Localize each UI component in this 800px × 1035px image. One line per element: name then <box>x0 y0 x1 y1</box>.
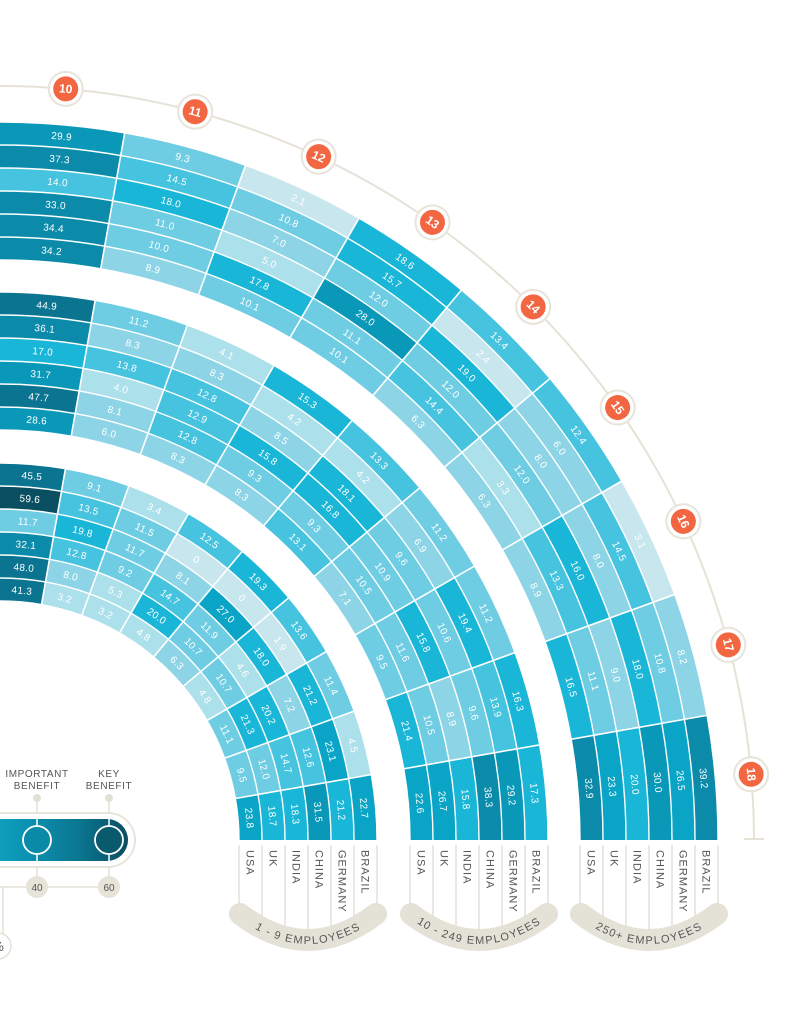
band 1-9 seg 14: 11.9 <box>198 620 220 642</box>
band 250+ seg 10: 34.2 <box>41 245 62 258</box>
band 10-249 seg 12: 4.1 <box>217 347 235 363</box>
band 250+ seg 12: 10.8 <box>277 212 300 231</box>
band 250+ seg 18: 23.3 <box>605 776 618 797</box>
band 1-9 seg 10: 59.6 <box>19 493 41 506</box>
band 1-9 seg 14: 19.3 <box>247 571 269 594</box>
marker 10 <box>47 70 84 107</box>
band 1-9 seg 12: 11.5 <box>133 521 156 540</box>
axis labels: 1 - 9 employees: INDIA <box>290 850 302 884</box>
band 10-249 seg 17: 9.6 <box>466 705 480 722</box>
band 10-249 seg 10: 36.1 <box>34 323 56 336</box>
band 10-249 seg 10: 31.7 <box>30 369 52 382</box>
band 10-249 seg 16: 19.4 <box>455 612 474 635</box>
band 250+ seg 17: 11.1 <box>585 670 601 692</box>
band 10-249 seg 16: 11.6 <box>393 641 411 664</box>
band 250+ seg 16: 8.9 <box>527 581 543 600</box>
legend labels: KEY <box>98 769 120 780</box>
band 1-9 seg 16: 21.3 <box>238 713 256 737</box>
band 250+ seg 10: 34.4 <box>43 222 64 235</box>
band 10-249 seg 11: 13.8 <box>115 359 138 375</box>
band 1-9 seg 11: 3.2 <box>56 592 73 606</box>
band 10-249 seg 10 <box>0 210 630 1035</box>
band 1-9 seg 10: 48.0 <box>13 562 35 575</box>
band 1-9 seg 15: 10.7 <box>213 672 234 695</box>
legend: colour scale <box>0 769 135 959</box>
band 1-9 seg 16: 11.4 <box>321 675 340 697</box>
marker 14: 14 <box>523 297 543 317</box>
axis labels: 250+ employees: GERMANY <box>676 850 688 913</box>
band 10-249 seg 10: 47.7 <box>28 392 50 405</box>
band 250+ seg 16: 16.0 <box>568 559 586 583</box>
legend labels: BENEFIT <box>14 781 60 792</box>
band 1-9 seg 12: 9.2 <box>116 564 134 580</box>
band 1-9 seg 16: 11.1 <box>217 723 235 746</box>
marker 13 <box>409 199 456 246</box>
band 1-9 seg 10: 45.5 <box>21 471 43 483</box>
band 1-9 seg 13: 8.1 <box>173 570 192 588</box>
band 10-249 seg 11: 11.2 <box>128 315 150 331</box>
band 1-9 seg 13: 14.7 <box>158 588 181 608</box>
band 10-249 seg 18: 22.6 <box>413 793 425 814</box>
band 250+ seg 10: 29.9 <box>51 131 72 144</box>
band 10-249 seg 16: 15.8 <box>413 631 432 655</box>
axis labels: 10 - 249 employees: USA <box>414 850 426 876</box>
band 1-9 seg 12 <box>0 314 526 1035</box>
band 10-249 seg 13: 15.3 <box>296 391 319 412</box>
band 1-9 seg 17 <box>0 355 485 1035</box>
band 1-9 seg 16: 21.2 <box>300 684 319 707</box>
marker 13: 13 <box>423 213 442 232</box>
band 10-249 seg 15: 7.1 <box>336 590 353 608</box>
band 1-9 seg 18: 21.2 <box>334 799 347 821</box>
band 10-249 seg 14: 16.8 <box>319 499 341 521</box>
percent marker <box>0 933 11 959</box>
band 1-9 seg 11: 12.8 <box>65 547 88 563</box>
band 250+ seg 13: 18.6 <box>393 252 416 273</box>
band 1-9 seg 13: 12.5 <box>197 531 221 552</box>
band 10-249 seg 16: 11.2 <box>476 602 495 625</box>
axis labels: 1 - 9 employees: BRAZIL <box>358 850 370 895</box>
axis labels: 250+ employees: CHINA <box>654 850 666 889</box>
scale value 60: 60 <box>103 883 115 894</box>
axis labels: 250+ employees: INDIA <box>630 850 642 884</box>
legend labels <box>5 769 132 792</box>
band 1-9 seg 15: 18.0 <box>250 646 271 669</box>
band 1-9 seg 15: 13.6 <box>288 619 309 643</box>
band 10-249 seg 11: 8.1 <box>106 404 123 419</box>
band 1-9 seg 17: 9.5 <box>234 767 248 784</box>
axis labels: 10 - 249 employees: UK <box>438 850 450 867</box>
band 10-249 seg 14: 9.3 <box>304 517 323 536</box>
band 250+ seg 17: 10.8 <box>651 652 667 675</box>
band 10-249 seg 10: 17.0 <box>32 346 54 359</box>
band 1-9 seg 16 <box>0 314 526 1035</box>
band 250+ seg 15: 12.0 <box>511 463 532 487</box>
axis labels: 10 - 249 employees: 10 - 249 EMPLOYEES <box>417 918 540 944</box>
band 10-249 seg 13: 8.3 <box>232 487 251 504</box>
band 10-249 seg 13: 4.2 <box>285 411 303 429</box>
band 10-249 seg 12: 12.8 <box>195 387 219 406</box>
band 250+ seg 18: 39.2 <box>696 768 709 789</box>
band 10-249 seg 14: 13.3 <box>367 450 390 473</box>
band 250+ seg 13: 11.1 <box>341 327 363 348</box>
axis labels: 10 - 249 employees <box>400 845 558 951</box>
band 250+ seg 17: 18.0 <box>629 658 645 681</box>
band 1-9 seg 11: 19.8 <box>71 524 94 540</box>
band 10-249 seg 18: 26.7 <box>435 791 448 812</box>
band 10-249 seg 10: 28.6 <box>26 415 48 427</box>
band 1-9 seg 18 <box>0 411 429 1035</box>
marker 16 <box>661 499 706 544</box>
marker 18 <box>733 756 770 793</box>
axis labels: 1 - 9 employees: USA <box>244 850 256 876</box>
band 10-249 seg 13: 9.3 <box>245 468 264 486</box>
band 250+ seg 11: 11.0 <box>154 217 176 233</box>
band 1-9 seg 11: 9.1 <box>86 481 103 495</box>
band 10-249 seg 15: 10.5 <box>353 574 374 597</box>
band 250+ seg 18: 26.5 <box>674 770 686 791</box>
band 10-249 seg 13: 15.8 <box>256 447 279 468</box>
band 250+ seg 11: 14.5 <box>165 173 188 189</box>
axis labels: 250+ employees: UK <box>608 850 620 867</box>
band 1-9 seg 12: 3.2 <box>96 606 115 622</box>
band 250+ seg 18: 32.9 <box>582 778 595 799</box>
axis labels: 1 - 9 employees: CHINA <box>312 850 324 889</box>
band 1-9 seg 14: 6.3 <box>167 654 186 673</box>
marker 15 <box>594 384 641 431</box>
band 10-249 seg 12: 8.3 <box>208 367 226 384</box>
band 250+ seg 12: 5.0 <box>260 255 278 271</box>
band 10-249 seg 10: 44.9 <box>36 300 58 313</box>
marker 17: 17 <box>720 637 737 653</box>
band 1-9 seg 15 <box>0 289 551 1035</box>
band 1-9 seg 10 <box>0 411 429 1035</box>
axis labels: 1 - 9 employees: 1 - 9 EMPLOYEES <box>256 924 359 944</box>
axis labels: 10 - 249 employees: GERMANY <box>506 850 518 913</box>
marker 14 <box>509 283 557 331</box>
gradient pill <box>0 813 135 867</box>
band 1-9 seg 12: 5.3 <box>106 585 124 601</box>
band 250+ seg 14: 13.4 <box>488 330 510 352</box>
band 10-249 seg 18: 38.3 <box>481 787 494 808</box>
band 10-249 seg 12: 12.8 <box>176 429 199 447</box>
band 10-249 seg 12: 12.9 <box>185 408 209 427</box>
band 1-9 seg 17: 23.1 <box>322 740 338 763</box>
band 250+ seg 13: 15.7 <box>380 270 403 291</box>
band 10-249 seg 14: 13.1 <box>286 531 309 554</box>
band 250+ seg 14: 6.3 <box>408 413 427 432</box>
band 250+ seg 12: 17.8 <box>248 275 271 293</box>
band 250+ seg 10: 33.0 <box>45 200 66 212</box>
marker 16: 16 <box>674 512 693 531</box>
marker 11 <box>174 91 216 133</box>
band 250+ seg 13: 28.0 <box>353 308 377 329</box>
band 1-9 seg 12: 11.7 <box>123 542 146 561</box>
segment markers <box>47 70 770 793</box>
band 1-9 seg 14 <box>0 280 560 1035</box>
band 250+ seg 14: 12.0 <box>439 379 461 401</box>
band 1-9 seg 13 <box>0 289 551 1035</box>
band 250+ seg 16: 13.3 <box>547 569 565 593</box>
axis labels: 250+ employees: 250+ EMPLOYEES <box>596 922 701 944</box>
band 10-249 seg 11: 4.0 <box>112 382 129 397</box>
band 250+ seg 11: 8.9 <box>144 262 162 277</box>
band 1-9 seg 18: 18.3 <box>288 803 301 825</box>
band 250+ seg 11: 10.0 <box>147 239 170 255</box>
band 250+ seg 18: 30.0 <box>651 772 663 793</box>
axis labels: 1 - 9 employees: UK <box>266 850 278 867</box>
band 1-9 seg 10: 11.7 <box>17 516 38 529</box>
band 250+ seg 12: 2.1 <box>289 192 307 209</box>
band 250+ seg 12: 10.1 <box>238 295 261 314</box>
band 10-249 seg 12: 8.3 <box>169 451 187 467</box>
band 10-249 seg 18: 17.3 <box>527 783 540 804</box>
band 1-9 seg 17: 4.5 <box>345 737 359 754</box>
band 1-9 seg 17: 12.6 <box>300 746 316 769</box>
band 250+ seg 17: 8.2 <box>674 649 689 666</box>
axis labels: 10 - 249 employees: INDIA <box>460 850 472 884</box>
band 10-249 seg 15: 6.9 <box>411 537 429 555</box>
band 10-249 seg 17 <box>0 128 712 1035</box>
scale value 40: 40 <box>31 883 43 894</box>
band 1-9 seg 16: 7.2 <box>281 696 297 715</box>
band 1-9 seg 10: 41.3 <box>11 585 33 598</box>
band 250+ seg 18: 20.0 <box>628 774 640 795</box>
band 1-9 seg 14: 0 <box>236 593 248 605</box>
marker 17 <box>707 624 749 666</box>
band 1-9 seg 16: 20.2 <box>258 703 277 727</box>
band 10-249 seg 18 <box>0 210 630 1035</box>
band 250+ seg 17: 9.0 <box>608 667 622 684</box>
band 10-249 seg 14: 18.1 <box>335 483 357 505</box>
band 10-249 seg 17: 10.5 <box>420 714 436 737</box>
band 1-9 seg 13: 20.0 <box>145 606 168 627</box>
band 10-249 seg 14: 4.2 <box>353 468 372 487</box>
marker 18: 18 <box>744 767 759 782</box>
band 10-249 seg 18: 29.2 <box>504 785 517 806</box>
band 1-9 seg 13: 0 <box>190 554 202 567</box>
band 250+ seg 14: 19.0 <box>455 362 478 385</box>
band 250+ seg 11: 18.0 <box>159 195 182 211</box>
band 250+ seg 14: 14.4 <box>423 395 445 417</box>
band 10-249 seg 17: 21.4 <box>398 720 414 743</box>
legend labels: BENEFIT <box>86 781 132 792</box>
axis labels: 250+ employees <box>570 845 728 951</box>
band 250+ seg 15: 3.3 <box>494 479 511 497</box>
band 250+ seg 14: 2.4 <box>473 348 492 367</box>
band 1-9 seg 15: 4.6 <box>233 661 251 680</box>
band 10-249 seg 16: 10.6 <box>434 621 453 645</box>
marker 12 <box>296 134 341 179</box>
band 250+ seg 13: 12.0 <box>367 289 390 310</box>
band 250+ seg 16: 14.5 <box>609 540 628 563</box>
marker 11: 11 <box>187 103 203 120</box>
band 1-9 seg 14: 10.7 <box>181 636 204 659</box>
band 250+ seg 16: 3.1 <box>631 533 648 551</box>
band 10-249 seg 17: 13.9 <box>487 696 503 719</box>
band 250+ seg 17: 16.5 <box>562 676 578 699</box>
band 1-9 seg 18: 23.8 <box>242 807 255 829</box>
band 250+ seg 15: 6.3 <box>475 492 493 511</box>
band 1-9 seg 17: 14.7 <box>277 752 293 775</box>
legend labels: IMPORTANT <box>5 769 69 780</box>
scale value 60 <box>98 876 120 898</box>
scale value 40 <box>26 876 48 898</box>
band 250+ seg 15: 8.0 <box>531 453 549 471</box>
band 1-9 seg 11: 13.5 <box>77 502 100 518</box>
band 10-249 seg 15: 9.6 <box>392 550 410 569</box>
axis labels: 10 - 249 employees: CHINA <box>484 850 496 889</box>
band 10-249 seg 17: 16.3 <box>509 690 525 713</box>
band 250+ seg 15: 12.4 <box>567 424 588 447</box>
band 1-9 seg 18: 31.5 <box>311 801 324 823</box>
axis labels: 250+ employees: USA <box>584 850 596 876</box>
band 10-249 seg 17: 8.9 <box>443 711 458 728</box>
band 250+ seg 15: 6.0 <box>550 439 568 458</box>
band 250+ seg 11: 9.3 <box>174 151 191 166</box>
marker 10: 10 <box>58 81 73 96</box>
band 1-9 seg 18: 22.7 <box>357 797 370 819</box>
band 10-249 seg 18: 15.8 <box>458 789 471 810</box>
marker 12: 12 <box>310 147 328 166</box>
band 1-9 seg 13: 4.8 <box>134 627 152 644</box>
band 250+ seg 13: 10.1 <box>327 346 350 367</box>
band 10-249 seg 15: 10.9 <box>372 561 393 584</box>
band 1-9 seg 15: 1.9 <box>271 635 289 653</box>
axis labels: 1 - 9 employees <box>229 845 387 951</box>
band 10-249 seg 16: 9.5 <box>373 653 389 671</box>
band 1-9 seg 18: 18.7 <box>265 805 278 827</box>
band 1-9 seg 12: 3.4 <box>145 502 163 518</box>
band 10-249 seg 11 <box>0 128 712 1035</box>
band 10-249 seg 13: 8.5 <box>272 430 290 448</box>
band 10-249 seg 11: 6.0 <box>100 427 118 441</box>
band 250+ seg 12: 7.0 <box>270 234 288 250</box>
band 10-249 seg 11: 8.3 <box>124 338 141 352</box>
band 1-9 seg 15: 4.8 <box>196 688 213 706</box>
band 250+ seg 10: 37.3 <box>49 154 70 166</box>
band 10-249 seg 15: 11.2 <box>428 522 449 544</box>
band 1-9 seg 14: 27.0 <box>214 604 237 626</box>
band 1-9 seg 11 <box>0 355 485 1035</box>
band 1-9 seg 11: 8.0 <box>62 570 79 584</box>
band 1-9 seg 10: 32.1 <box>15 539 37 552</box>
axis labels: 1 - 9 employees: GERMANY <box>336 850 348 913</box>
axis labels: 250+ employees: BRAZIL <box>700 850 712 895</box>
marker 15: 15 <box>608 398 627 417</box>
band 250+ seg 16: 8.0 <box>590 552 606 570</box>
band 250+ seg 10: 14.0 <box>47 177 68 189</box>
band 1-9 seg 17: 12.0 <box>255 758 271 781</box>
axis labels: 10 - 249 employees: BRAZIL <box>530 850 542 895</box>
